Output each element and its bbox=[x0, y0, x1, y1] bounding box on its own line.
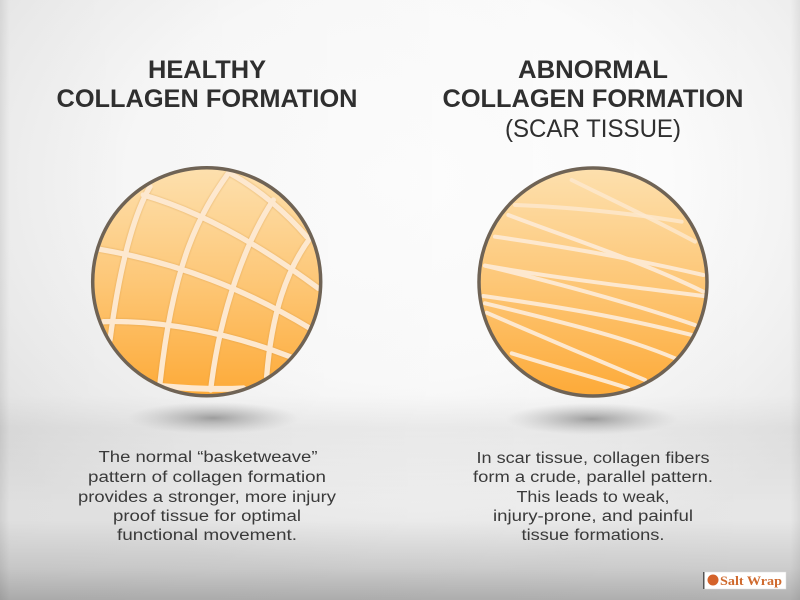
logo: Salt Wrap bbox=[703, 572, 786, 589]
heading: abnormal collagen formation (scar tissue): (SCAR TISSUE) bbox=[505, 115, 681, 143]
description: healthy: The normal “basketweave” bbox=[98, 449, 318, 466]
heading: healthy collagen formation: HEALTHY bbox=[148, 56, 266, 84]
description: scar tissue: In scar tissue, collagen fibers bbox=[476, 450, 710, 467]
description: healthy: provides a stronger, more injury bbox=[78, 489, 336, 506]
description: scar tissue bbox=[473, 450, 713, 544]
icon: salt wrap mark bbox=[708, 574, 718, 586]
description: scar tissue: tissue formations. bbox=[522, 527, 664, 544]
abnormal parallel fibres circle bbox=[479, 168, 707, 396]
description: scar tissue: form a crude, parallel pattern. bbox=[473, 469, 713, 486]
description: healthy bbox=[78, 449, 336, 544]
heading: abnormal collagen formation (scar tissue): COLLAGEN FORMATION bbox=[442, 85, 744, 113]
description: healthy: pattern of collagen formation bbox=[88, 469, 326, 486]
heading: abnormal collagen formation (scar tissue) bbox=[442, 56, 744, 143]
description: scar tissue: This leads to weak, bbox=[516, 489, 670, 506]
logo: Salt Wrap: Salt Wrap bbox=[720, 574, 782, 588]
description: healthy: proof tissue for optimal bbox=[113, 508, 301, 525]
description: healthy: functional movement. bbox=[117, 527, 297, 544]
heading: healthy collagen formation: COLLAGEN FORMATION bbox=[56, 85, 358, 113]
shadow under abnormal circle bbox=[506, 403, 678, 435]
heading: healthy collagen formation bbox=[56, 56, 358, 113]
healthy basketweave circle bbox=[93, 168, 321, 396]
heading: abnormal collagen formation (scar tissue): ABNORMAL bbox=[518, 56, 668, 84]
shadow under healthy circle bbox=[127, 402, 299, 434]
description: scar tissue: injury-prone, and painful bbox=[493, 508, 693, 525]
